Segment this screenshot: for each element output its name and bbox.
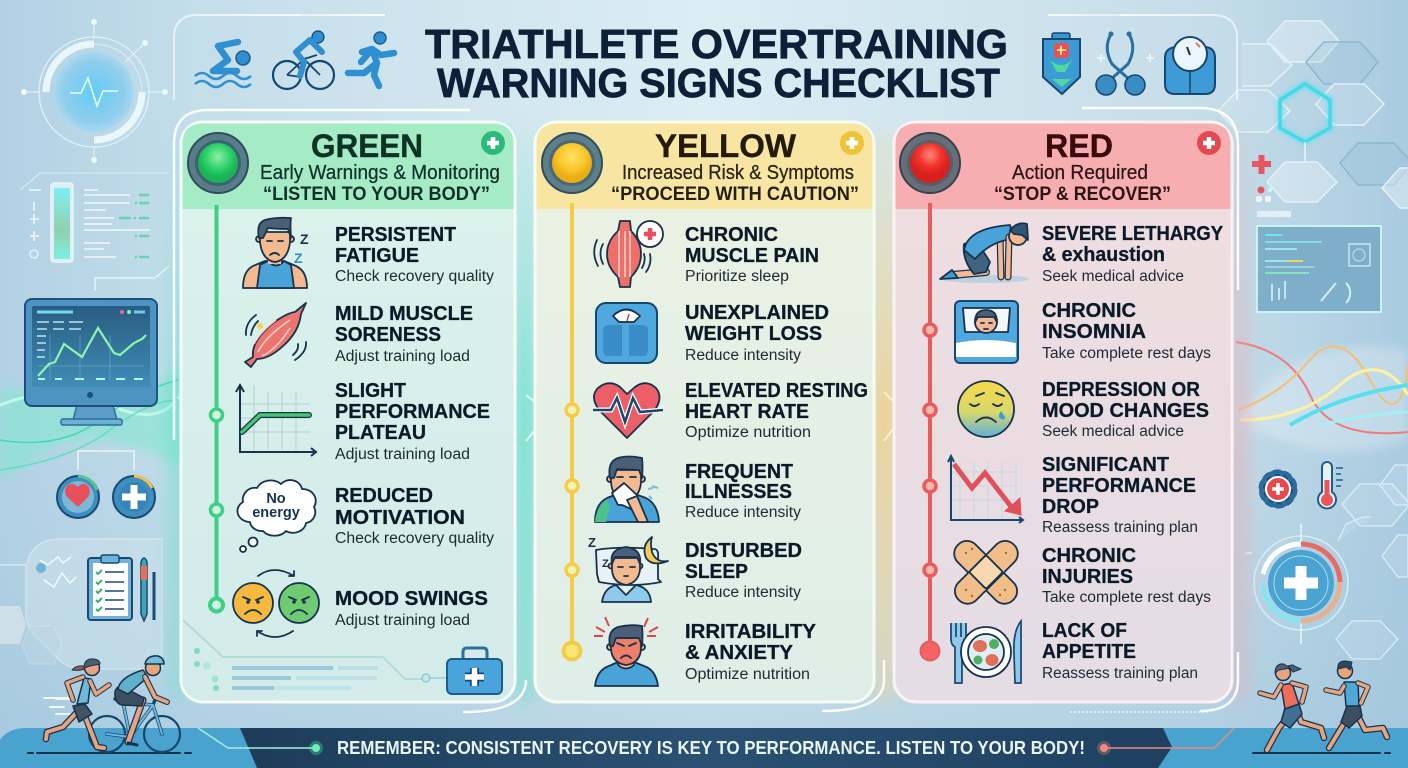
text: persistent fatigue: Check recovery quality [335, 268, 494, 285]
text: chronic muscle pain [685, 223, 819, 285]
heading: green [260, 128, 500, 205]
icon: weight scale [596, 303, 657, 363]
text: unexplained weight loss: WEIGHT LOSS [685, 322, 822, 345]
text: frequent illnesses: ILLNESSES [685, 480, 792, 503]
text: chronic muscle pain: MUSCLE PAIN [685, 244, 819, 267]
text: significant performance drop: PERFORMANCE [1042, 474, 1196, 497]
text: mild muscle soreness [335, 302, 473, 365]
dashboard panel right [1257, 226, 1381, 312]
heading: red: RED [1045, 128, 1113, 164]
icon: mood swings faces [233, 570, 319, 637]
heading: yellow: “PROCEED WITH CAUTION” [611, 184, 859, 205]
decorative: side panel with gauge [20, 173, 170, 291]
text: irritability and anxiety: IRRITABILITY [685, 620, 816, 643]
text: persistent fatigue [335, 223, 494, 285]
text: reduced motivation [335, 484, 494, 547]
heading: green: Early Warnings & Monitoring [260, 162, 500, 184]
text: lack of appetite: LACK OF [1042, 619, 1127, 642]
text: chronic injuries: Take complete rest days [1042, 589, 1211, 606]
icon: red plus [1252, 155, 1291, 217]
text: elevated resting heart rate: HEART RATE [685, 400, 809, 423]
icon: disturbed sleep: Z [602, 558, 609, 570]
heading: yellow: YELLOW [655, 128, 797, 164]
icon: runner [348, 32, 394, 86]
decorative: connection glow between panels [172, 130, 1246, 700]
heading: green: “LISTEN TO YOUR BODY” [263, 184, 490, 205]
text: reduced motivation: MOTIVATION [335, 506, 465, 529]
icon: red traffic light [900, 133, 960, 193]
text: chronic muscle pain: CHRONIC [685, 223, 778, 246]
text: chronic insomnia [1042, 299, 1211, 362]
background: glowing waves left [0, 345, 190, 477]
text: mood swings: Adjust training load [335, 612, 470, 629]
text: chronic injuries [1042, 544, 1211, 606]
icon: no energy thought bubble: energy [252, 505, 300, 521]
text: significant performance drop: SIGNIFICANT [1042, 453, 1169, 476]
panel header: yellow [536, 124, 872, 209]
text: severe lethargy and exhaustion: SEVERE LETHARGY [1042, 222, 1223, 245]
text: reduced motivation: Check recovery quality [335, 530, 494, 547]
illustration: two runners [1253, 661, 1390, 753]
text: unexplained weight loss: Reduce intensity [685, 347, 801, 364]
panel header: green [182, 124, 514, 209]
text: significant performance drop: Reassess training plan [1042, 519, 1198, 536]
text: irritability and anxiety: Optimize nutrition [685, 666, 810, 683]
icon: green traffic light [188, 133, 248, 193]
icon: crossed bandages [949, 536, 1023, 609]
heading: yellow: Increased Risk & Symptoms [622, 162, 854, 184]
text: unexplained weight loss [685, 301, 829, 364]
timeline: yellow [564, 203, 580, 660]
icon: performance drop chart [948, 456, 1023, 523]
icon: disturbed sleep: Z [588, 535, 596, 550]
icon: medical HUD circle [1246, 524, 1348, 644]
icon: plateau chart [236, 385, 316, 456]
title: TRIATHLETE OVERTRAINING [425, 21, 1008, 67]
text: slight performance plateau: PERFORMANCE [335, 400, 490, 423]
text: disturbed sleep: SLEEP [685, 560, 748, 583]
icon: plate with cutlery [951, 621, 1021, 683]
text: chronic insomnia: Take complete rest days [1042, 345, 1211, 362]
text: disturbed sleep: DISTURBED [685, 539, 802, 562]
arrow: green to yellow [526, 395, 549, 441]
text: frequent illnesses: Reduce intensity [685, 504, 801, 521]
text: frequent illnesses: FREQUENT [685, 460, 793, 483]
text: depression or mood changes: Seek medical advice [1042, 423, 1184, 440]
icon: irritated person [594, 617, 658, 686]
icon: muscle soreness [245, 303, 306, 367]
heading: red: “STOP & RECOVER” [994, 184, 1171, 205]
icon: cyclist [273, 31, 334, 89]
text: chronic insomnia: INSOMNIA [1042, 320, 1146, 343]
timeline: green [210, 205, 223, 612]
icon: clipboard checklist [88, 555, 154, 621]
panel: yellow [535, 122, 874, 702]
icon: stethoscope [1096, 32, 1154, 95]
background: glowing waves right [1236, 342, 1408, 451]
panel header: red [896, 124, 1230, 209]
halo frame lines [174, 108, 1238, 712]
text: significant performance drop [1042, 453, 1198, 536]
text: unexplained weight loss: UNEXPLAINED [685, 301, 829, 324]
icon: persistent fatigue person: Z [300, 231, 309, 247]
icon: green plus badge [481, 131, 505, 155]
icon: weight scale top [1165, 37, 1215, 94]
heading: yellow [611, 128, 859, 205]
banner: reminder [198, 728, 1234, 768]
text: reduced motivation: REDUCED [335, 484, 433, 507]
text: chronic insomnia: CHRONIC [1042, 299, 1136, 322]
decorative: green panel footer circuit and lines [183, 620, 446, 691]
text: disturbed sleep: Reduce intensity [685, 584, 801, 601]
heading: red [994, 128, 1171, 205]
decorative: HUD left [21, 19, 168, 163]
text: lack of appetite [1042, 619, 1198, 682]
icon: heart with pulse [593, 383, 663, 438]
icon: gear with plus [1261, 472, 1295, 506]
decorative: hexagon cluster top right [1218, 21, 1408, 208]
icon: shield [1043, 33, 1080, 94]
decorative: dotted line under red panel [1070, 711, 1210, 713]
icon: no energy thought bubble: No [266, 491, 286, 507]
timeline: red [920, 203, 940, 660]
text: mild muscle soreness: SORENESS [335, 323, 441, 346]
text: chronic injuries: CHRONIC [1042, 544, 1136, 567]
icon: chronic muscle pain [594, 221, 663, 287]
text: slight performance plateau [335, 379, 490, 463]
heading: green: GREEN [311, 128, 423, 164]
text: persistent fatigue: PERSISTENT [335, 223, 456, 246]
text: depression or mood changes [1042, 378, 1209, 440]
icon: sad face [958, 381, 1014, 437]
text: mood swings [335, 587, 488, 629]
icon: computer monitor with chart [25, 299, 157, 425]
text: elevated resting heart rate [685, 379, 868, 441]
text: mild muscle soreness: MILD MUSCLE [335, 302, 473, 325]
illustration: runner and cyclist [28, 656, 191, 753]
panel: green [181, 122, 515, 702]
text: depression or mood changes: MOOD CHANGES [1042, 399, 1209, 422]
title [425, 21, 1008, 106]
icon: yellow plus badge [840, 131, 864, 155]
icon: persistent fatigue person [243, 218, 309, 288]
arrow: yellow to red [884, 392, 905, 441]
text: severe lethargy and exhaustion: Seek medical advice [1042, 268, 1184, 285]
text: depression or mood changes: DEPRESSION OR [1042, 378, 1200, 401]
top frame lines [174, 15, 1237, 100]
text: elevated resting heart rate: Optimize nutrition [685, 424, 811, 441]
text: slight performance plateau: SLIGHT [335, 379, 406, 402]
icon: heart gauge circle [57, 451, 134, 518]
text: severe lethargy and exhaustion [1042, 222, 1223, 285]
text: severe lethargy and exhaustion: & exhaustion [1042, 243, 1165, 266]
icon: thermometer [1318, 462, 1343, 508]
icon: red plus badge [1197, 131, 1221, 155]
text: lack of appetite: Reassess training plan [1042, 665, 1198, 682]
heading: red: Action Required [1012, 162, 1148, 184]
icon: exhausted crawling person [940, 223, 1029, 283]
icon: no energy thought bubble [237, 480, 316, 552]
text: disturbed sleep [685, 539, 802, 601]
banner: reminder: REMEMBER: CONSISTENT RECOVERY IS KEY TO PERFORMANCE. LISTEN TO YOUR BODY! [337, 737, 1085, 758]
icon: plus circle [113, 476, 155, 518]
text: chronic muscle pain: Prioritize sleep [685, 268, 789, 285]
icon: insomnia bed [955, 301, 1018, 363]
panel: red [894, 122, 1232, 702]
text: chronic injuries: INJURIES [1042, 565, 1133, 588]
text: mild muscle soreness: Adjust training load [335, 348, 470, 365]
decorative: rounded backdrop behind clipboard [0, 539, 162, 669]
icon: swimmer [195, 42, 251, 87]
icon: disturbed sleep [588, 535, 668, 602]
icon: first aid kit [447, 648, 502, 694]
text: irritability and anxiety: & ANXIETY [685, 641, 793, 664]
text: irritability and anxiety [685, 620, 816, 683]
text: slight performance plateau: Adjust training load [335, 446, 470, 463]
footer band [0, 728, 1408, 768]
text: significant performance drop: DROP [1042, 495, 1099, 518]
icon: persistent fatigue person: Z [294, 250, 303, 266]
title: WARNING SIGNS CHECKLIST [437, 60, 1000, 106]
decorative: hexagons lower right [1336, 465, 1408, 659]
text: slight performance plateau: PLATEAU [335, 421, 426, 444]
icon: person with tissue [595, 456, 659, 522]
icon: yellow traffic light [542, 133, 602, 193]
text: elevated resting heart rate: ELEVATED RESTING [685, 379, 868, 402]
text: frequent illnesses [685, 460, 801, 521]
icon: glowing hexagon [1280, 84, 1330, 162]
text: persistent fatigue: FATIGUE [335, 244, 419, 267]
text: mood swings: MOOD SWINGS [335, 587, 488, 610]
text: lack of appetite: APPETITE [1042, 640, 1136, 663]
